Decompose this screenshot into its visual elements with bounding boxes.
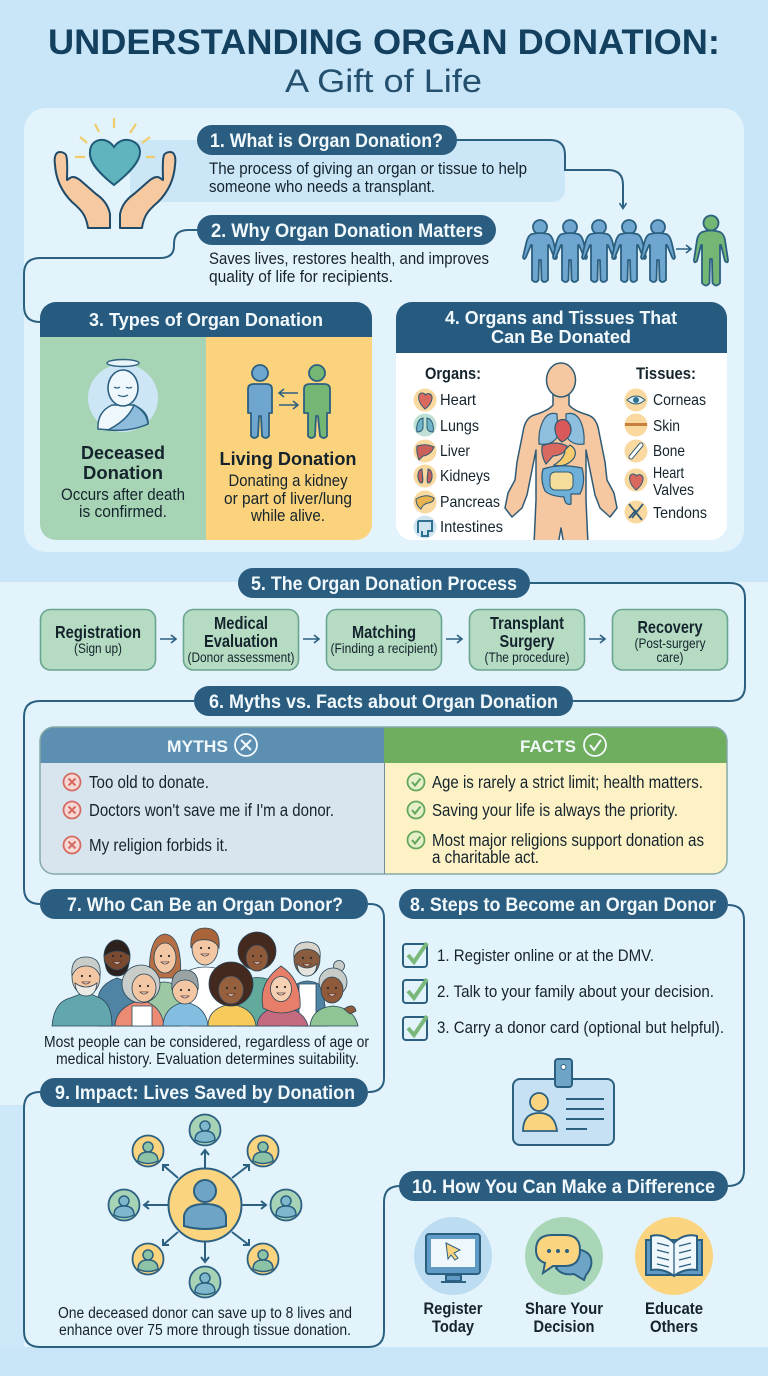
heading: section 5	[238, 568, 530, 598]
icon: living donor exchange	[248, 365, 330, 438]
text: deceased donation: Donation	[83, 463, 163, 483]
title: UNDERSTANDING ORGAN DONATION:	[48, 23, 720, 62]
illustration: diverse group of people	[52, 928, 358, 1026]
text: section 7 body: Most people can be considered, regardless of age or	[44, 1034, 369, 1051]
checklist: steps to register	[403, 943, 724, 1040]
heading: section 7: 7. Who Can Be an Organ Donor?	[67, 895, 343, 916]
text: section 2 body: quality of life for recipients.	[209, 267, 393, 286]
text: section 1 body: The process of giving an organ or tissue to help	[209, 159, 527, 178]
flow: donation process steps	[40, 610, 728, 670]
step: transplant surgery: (The procedure)	[484, 650, 570, 665]
heading: section 8: 8. Steps to Become an Organ Donor	[410, 895, 717, 916]
heading: section 4: Can Be Donated	[491, 326, 631, 347]
text: section 9 body	[58, 1305, 352, 1339]
list: tissues: Tendons	[653, 505, 707, 522]
text: section 9 body: enhance over 75 more through tissue donation.	[59, 1322, 351, 1339]
icon: heart valves	[624, 468, 648, 492]
text: deceased donation: Occurs after death	[61, 486, 185, 504]
heading: section 7	[40, 889, 368, 919]
column: myths: My religion forbids it.	[89, 835, 228, 855]
action: educate others: Educate	[645, 1300, 703, 1318]
list: tissues: Skin	[653, 418, 680, 435]
step: transplant surgery	[470, 610, 584, 670]
icon: tendons	[624, 500, 648, 524]
step: medical evaluation: Evaluation	[204, 631, 278, 651]
column: facts: a charitable act.	[432, 847, 539, 867]
column: myths: Doctors won't save me if I'm a donor.	[89, 800, 334, 820]
text: deceased donation: Deceased	[81, 443, 165, 463]
icon: deceased donor with halo	[88, 360, 158, 432]
icon: bone	[624, 440, 648, 462]
icon: cross badge	[235, 734, 257, 756]
column: myths	[64, 734, 334, 855]
text: section 9 body: One deceased donor can save up to 8 lives and	[58, 1305, 352, 1322]
column: facts: FACTS	[520, 737, 576, 756]
icon: central donor	[168, 1168, 242, 1242]
panel: organs and tissues	[396, 302, 727, 545]
column: facts: Saving your life is always the priority.	[432, 800, 678, 820]
step: matching	[326, 610, 442, 670]
diagram: one donor saves eight lives	[108, 1114, 302, 1298]
step: recovery: Recovery	[638, 617, 703, 637]
checklist: steps to register: 1. Register online or at the DMV.	[437, 946, 654, 965]
list: organs: Pancreas	[440, 494, 500, 511]
text: section 2 body	[209, 249, 489, 286]
icon: kidneys	[414, 464, 436, 488]
column: myths: MYTHS	[167, 737, 228, 756]
step: matching: Matching	[352, 622, 416, 642]
step: matching: (Finding a recipient)	[330, 641, 438, 656]
icon: lungs	[414, 414, 436, 436]
icon: donors chain and recipient	[523, 216, 728, 286]
list: organs: Heart	[440, 392, 477, 409]
list: tissues: Valves	[653, 482, 694, 499]
column: facts: Most major religions support donation as	[432, 830, 704, 850]
step: medical evaluation	[184, 610, 298, 670]
text: section 7 body	[44, 1034, 369, 1068]
connector: section 9 border to section 10	[24, 1092, 400, 1347]
text: section 1 body	[209, 159, 527, 196]
step: recovery: care)	[656, 650, 684, 665]
step: recovery: (Post-surgery	[634, 636, 706, 651]
title: A Gift of Life	[285, 63, 482, 99]
heading: section 10: 10. How You Can Make a Difference	[412, 1177, 715, 1198]
heading: section 10	[399, 1171, 728, 1201]
list: organs	[414, 364, 503, 538]
action: educate others	[635, 1217, 713, 1336]
text: section 1 body: someone who needs a transplant.	[209, 177, 435, 196]
panel: types of organ donation	[40, 302, 372, 540]
section 1 background strip	[130, 140, 565, 202]
panel: myths vs facts	[40, 727, 727, 874]
list: organs: Intestines	[440, 519, 503, 536]
text: living donation: Living Donation	[220, 449, 356, 469]
heading: section 8	[399, 889, 728, 919]
heading: section 2	[197, 215, 496, 245]
text: living donation: or part of liver/lung	[224, 490, 352, 508]
connector: section 7 to section 9	[368, 904, 384, 1092]
heading: section 9: 9. Impact: Lives Saved by Donation	[55, 1083, 355, 1104]
step: transplant surgery: Transplant	[490, 613, 564, 633]
icon: cornea	[624, 388, 648, 412]
list: tissues	[624, 364, 707, 524]
list: tissues: Corneas	[653, 392, 706, 409]
action: share your decision: Decision	[534, 1318, 594, 1336]
heading: section 6: 6. Myths vs. Facts about Organ Donation	[209, 692, 558, 713]
heading: section 4: 4. Organs and Tissues That	[445, 307, 677, 328]
checklist: steps to register: 2. Talk to your family about your decision.	[437, 982, 714, 1001]
action: register today: Today	[432, 1318, 475, 1336]
icon: donor card	[513, 1059, 614, 1145]
icon: heart	[414, 388, 436, 412]
text: living donation: while alive.	[250, 507, 325, 525]
list: organs: Kidneys	[440, 468, 490, 485]
icon: check badge	[584, 734, 606, 756]
title	[48, 23, 720, 99]
step: transplant surgery: Surgery	[500, 631, 555, 651]
step: medical evaluation: (Donor assessment)	[188, 650, 294, 665]
icons: eight recipients	[108, 1114, 302, 1298]
column: facts	[408, 734, 704, 867]
checklist: steps to register: 3. Carry a donor card (optional but helpful).	[437, 1018, 724, 1037]
action: register today: Register	[424, 1300, 483, 1318]
connector: section 10 to section 8	[728, 905, 744, 1186]
icon: body with organs	[505, 363, 617, 545]
heading: section 1	[197, 125, 457, 155]
arrows radiating from donor	[144, 1150, 266, 1262]
icon: intestines	[414, 516, 436, 538]
action: share your decision	[525, 1217, 604, 1336]
heading: section 5: 5. The Organ Donation Process	[251, 574, 517, 595]
heading: section 1: 1. What is Organ Donation?	[210, 131, 443, 152]
column: myths: Too old to donate.	[89, 772, 209, 792]
text: deceased donation: is confirmed.	[79, 503, 167, 521]
heading: section 3: 3. Types of Organ Donation	[89, 309, 323, 330]
list: tissues: Bone	[653, 443, 685, 460]
heading: section 6	[194, 686, 573, 716]
icon: skin	[624, 414, 648, 436]
connector: section 5 to section 6	[530, 583, 745, 701]
text: section 2 body: Saves lives, restores health, and improves	[209, 249, 489, 268]
list: organs: Liver	[440, 443, 471, 460]
text: living donation: Donating a kidney	[228, 472, 348, 490]
connector: section 6 to section 7	[24, 701, 194, 904]
action: register today	[414, 1217, 492, 1336]
step: recovery	[612, 610, 728, 670]
icon: liver	[414, 440, 436, 462]
step: registration	[40, 610, 156, 670]
heading: section 9	[40, 1078, 368, 1107]
connector: section 2 to section 3	[24, 230, 197, 322]
action: educate others: Others	[650, 1318, 698, 1336]
column: facts: Age is rarely a strict limit; health matters.	[432, 772, 703, 792]
action: share your decision: Share Your	[525, 1300, 604, 1318]
list: tissues: Heart	[653, 465, 684, 482]
step: registration: Registration	[55, 622, 141, 642]
arrows between steps	[160, 635, 605, 643]
step: medical evaluation: Medical	[214, 613, 268, 633]
text: deceased donation	[61, 443, 185, 521]
step: registration: (Sign up)	[74, 641, 122, 656]
icon: hands holding heart	[55, 118, 175, 228]
text: section 7 body: medical history. Evaluation determines suitability.	[56, 1051, 359, 1068]
heading: section 2: 2. Why Organ Donation Matters	[211, 221, 483, 242]
list: organs: Organs:	[425, 364, 481, 383]
icon: pancreas	[414, 490, 436, 514]
connector: section 1 to recipients	[457, 140, 623, 208]
text: living donation	[220, 449, 356, 525]
list: organs: Lungs	[440, 418, 479, 435]
list: tissues: Tissues:	[636, 364, 696, 383]
heading: section 4	[445, 307, 677, 347]
